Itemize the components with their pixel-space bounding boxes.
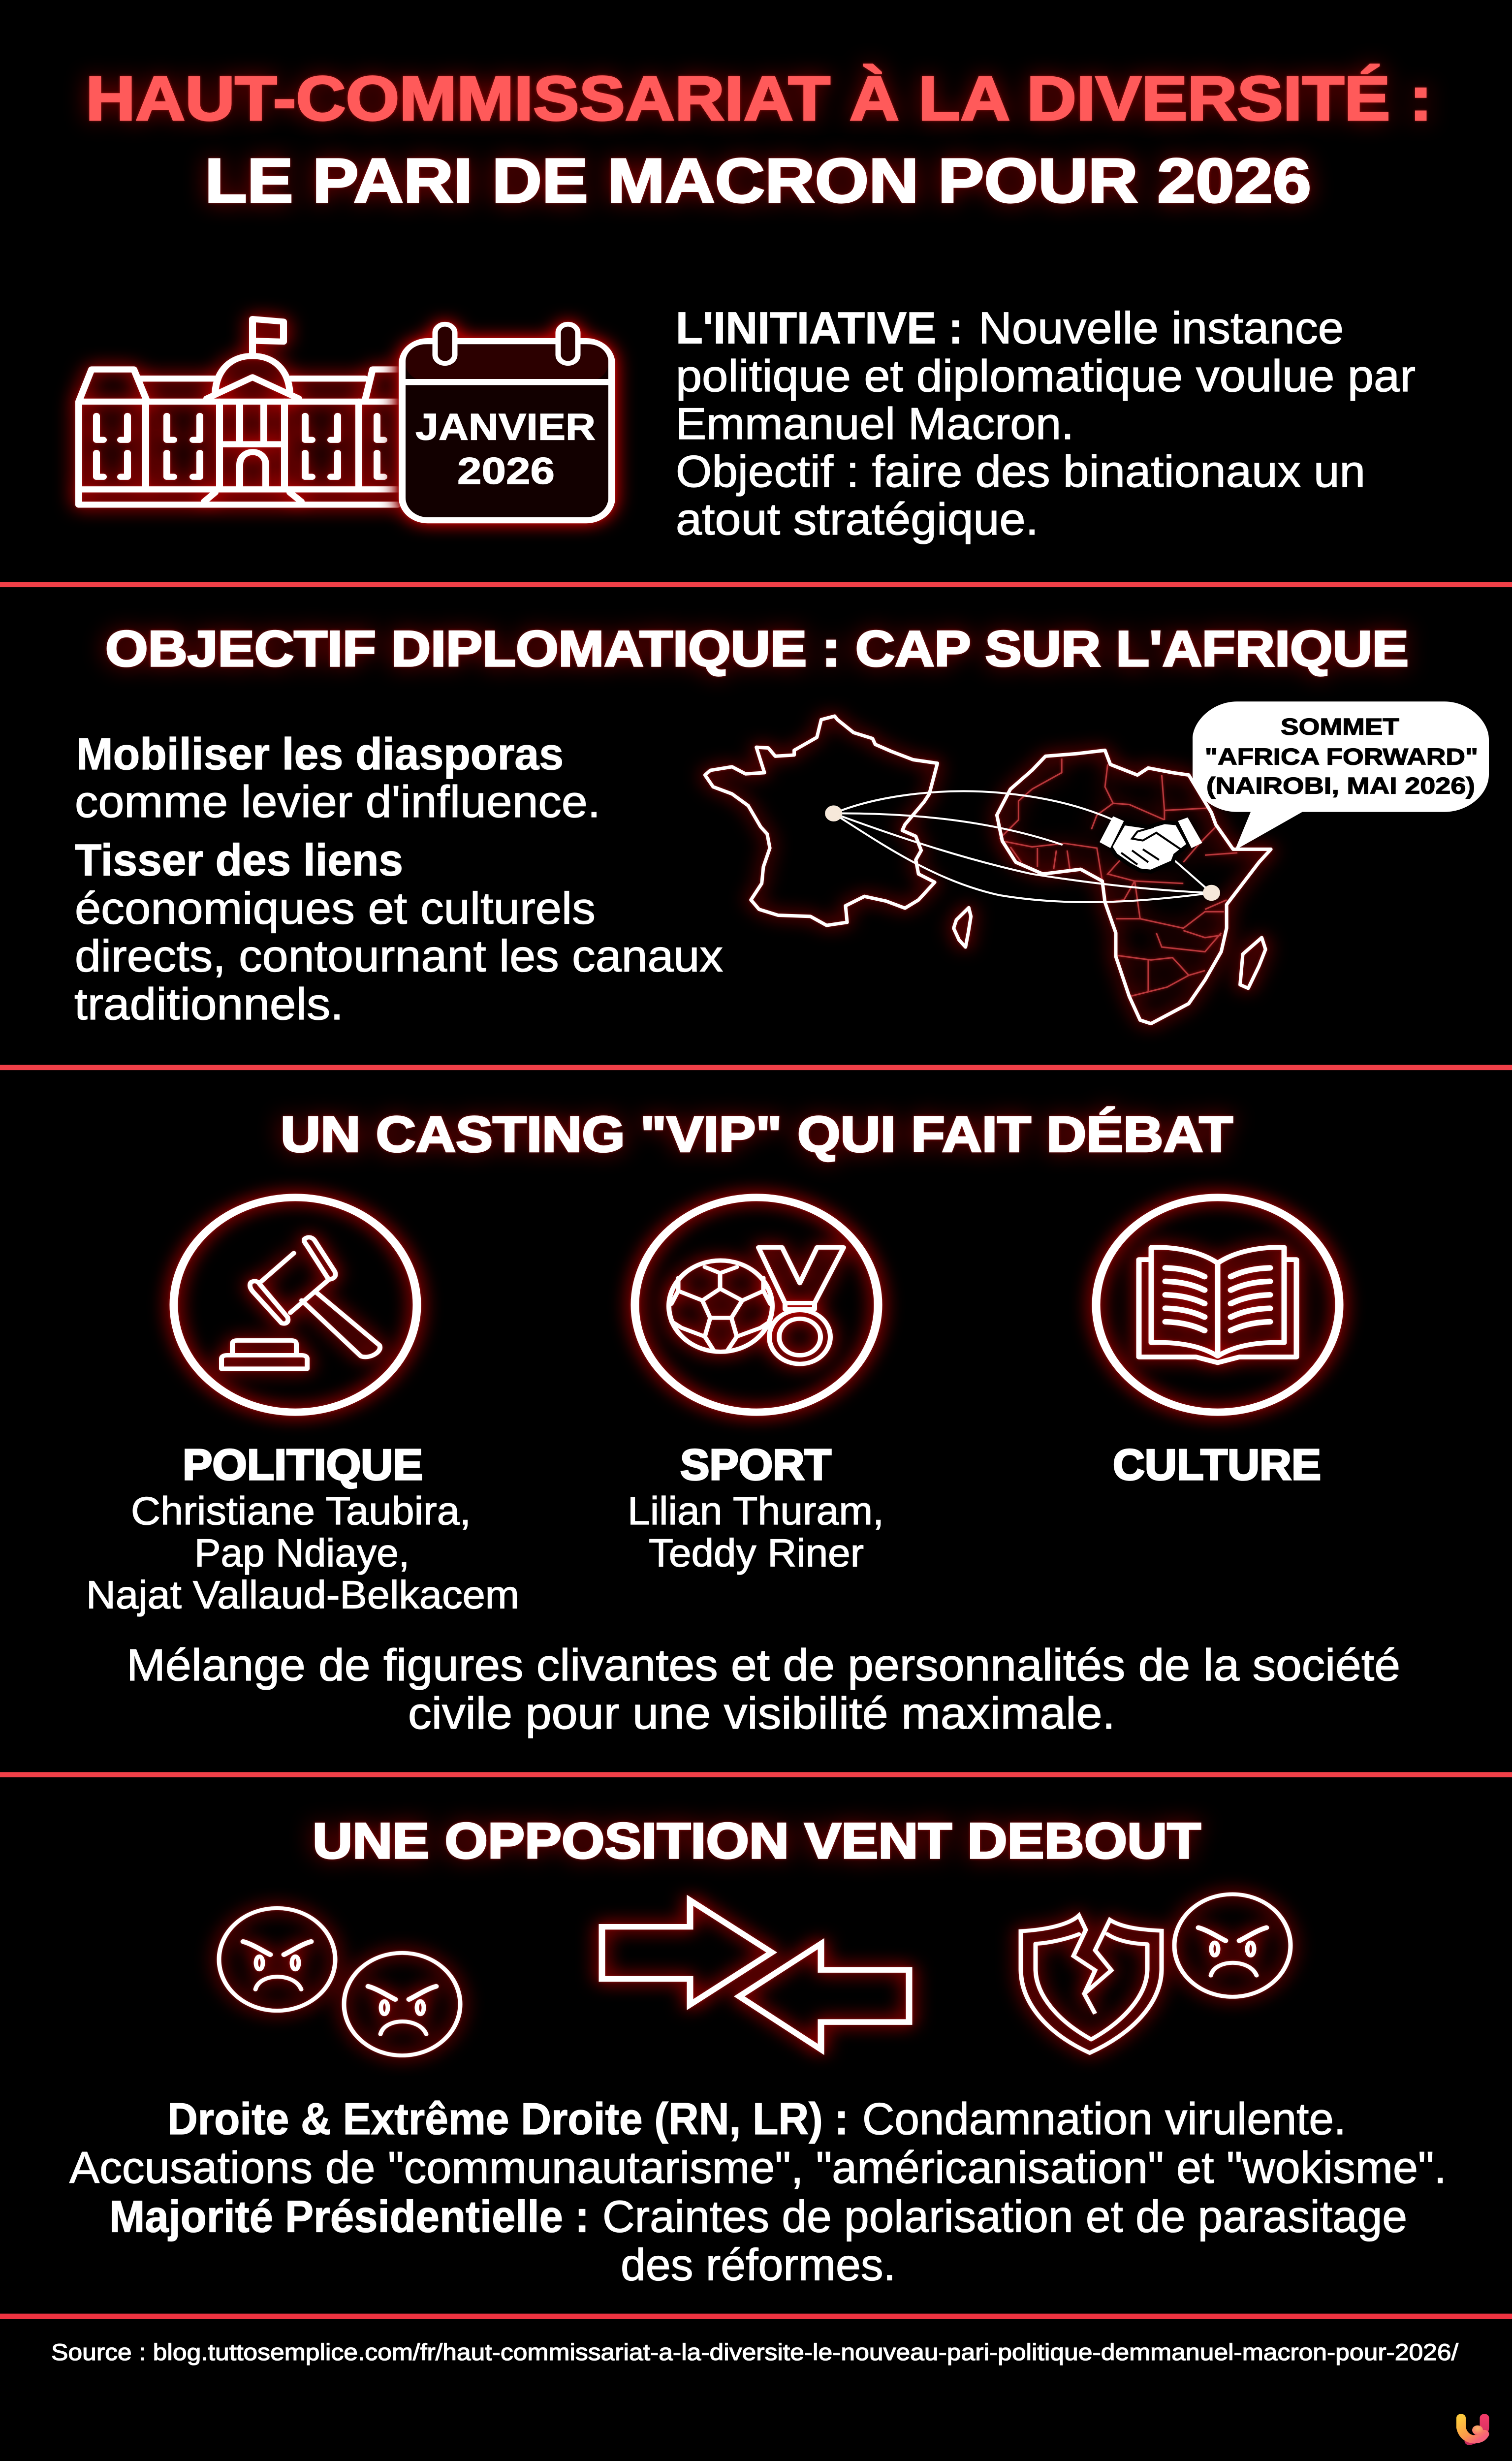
callout: summit <box>1193 701 1489 850</box>
icon: gavel <box>174 1198 417 1412</box>
icon: calendar <box>402 324 612 520</box>
calendar date: JANVIER <box>415 407 596 448</box>
heading: OBJECTIF DIPLOMATIQUE : CAP SUR L'AFRIQUE <box>105 621 1409 677</box>
map outlines <box>705 716 1271 1024</box>
diplomatic text: Tisser des liens <box>75 835 403 885</box>
logo <box>1461 2418 1484 2441</box>
Africa outline <box>997 750 1271 1024</box>
diplomatic text: traditionnels. <box>74 978 344 1029</box>
Madagascar outline <box>1240 938 1265 988</box>
panel: casting <box>86 1106 1400 1738</box>
icon: broken shield and angry face <box>1021 1894 1291 2053</box>
casting summary: civile pour une visibilité maximale. <box>408 1688 1115 1738</box>
label: SPORT <box>680 1440 831 1489</box>
initiative text: Emmanuel Macron. <box>676 399 1074 449</box>
map: France and Africa <box>705 701 1489 1024</box>
callout: summit: "AFRICA FORWARD" <box>1205 743 1478 770</box>
panel: initiative <box>79 303 1416 544</box>
heading: UNE OPPOSITION VENT DEBOUT <box>313 1813 1201 1869</box>
initiative text: Objectif : faire des binationaux un <box>676 446 1365 497</box>
callout: summit: SOMMET <box>1281 713 1399 740</box>
title line 1: HAUT-COMMISSARIAT À LA DIVERSITÉ : <box>86 63 1432 133</box>
opposition text: Condamnation virulente. <box>862 2094 1346 2144</box>
connection arcs <box>825 791 1220 902</box>
diplomatic text <box>74 729 723 1029</box>
opposition text <box>69 2094 1447 2290</box>
France outline <box>705 716 938 925</box>
names <box>628 1489 884 1575</box>
heading: UN CASTING "VIP" QUI FAIT DÉBAT <box>281 1106 1233 1163</box>
title line 2: LE PARI DE MACRON POUR 2026 <box>205 145 1311 216</box>
diplomatic text: comme levier d'influence. <box>75 777 600 827</box>
names <box>86 1489 519 1616</box>
initiative text: atout stratégique. <box>676 494 1039 544</box>
label: CULTURE <box>1113 1440 1321 1489</box>
Africa borders <box>1000 758 1237 997</box>
icon: handshake <box>1100 816 1202 872</box>
icon: football and medal <box>635 1198 878 1412</box>
names: Najat Vallaud-Belkacem <box>86 1573 519 1616</box>
opposition text: Craintes de polarisation et de parasitage <box>602 2191 1407 2241</box>
panel: opposition <box>69 1813 1447 2290</box>
names: Lilian Thuram, <box>628 1489 884 1533</box>
source: Source : blog.tuttosemplice.com/fr/haut-commissariat-a-la-diversite-le-nouveau-pari-politique-demmanuel-macron-pour-2026/ <box>51 2339 1459 2365</box>
diplomatic text: directs, contournant les canaux <box>75 931 723 981</box>
column: sport <box>628 1198 884 1575</box>
column: politique <box>86 1198 519 1616</box>
diplomatic text: économiques et culturels <box>75 883 596 933</box>
calendar year: 2026 <box>457 450 555 492</box>
initiative text: L'INITIATIVE : <box>676 303 963 353</box>
initiative text: Nouvelle instance <box>978 303 1344 353</box>
callout: summit: (NAIROBI, MAI 2026) <box>1206 772 1475 799</box>
label: POLITIQUE <box>183 1440 423 1489</box>
casting summary <box>126 1640 1400 1738</box>
initiative text: politique et diplomatique voulue par <box>676 350 1416 401</box>
icon: open book <box>1096 1198 1339 1412</box>
column: culture <box>1096 1198 1339 1489</box>
diplomatic text: Mobiliser les diasporas <box>76 729 564 779</box>
calendar outline <box>402 324 612 520</box>
title <box>86 63 1432 216</box>
Nairobi point <box>1203 885 1220 901</box>
icon: opposing arrows <box>602 1900 909 2050</box>
initiative text <box>676 303 1416 544</box>
opposition text: des réformes. <box>621 2240 896 2290</box>
opposition text: Majorité Présidentielle : <box>109 2191 589 2241</box>
casting summary: Mélange de figures clivantes et de personnalités de la société <box>126 1640 1400 1690</box>
names: Christiane Taubira, <box>131 1489 471 1533</box>
opposition text: Droite & Extrême Droite (RN, LR) : <box>167 2094 849 2144</box>
icon: government building <box>79 319 398 505</box>
Corsica outline <box>954 908 971 947</box>
panel: objectif diplomatique <box>74 621 1489 1029</box>
names: Pap Ndiaye, <box>194 1531 410 1575</box>
icon: angry faces <box>219 1908 460 2055</box>
names: Teddy Riner <box>649 1531 864 1575</box>
Paris point <box>825 805 842 821</box>
